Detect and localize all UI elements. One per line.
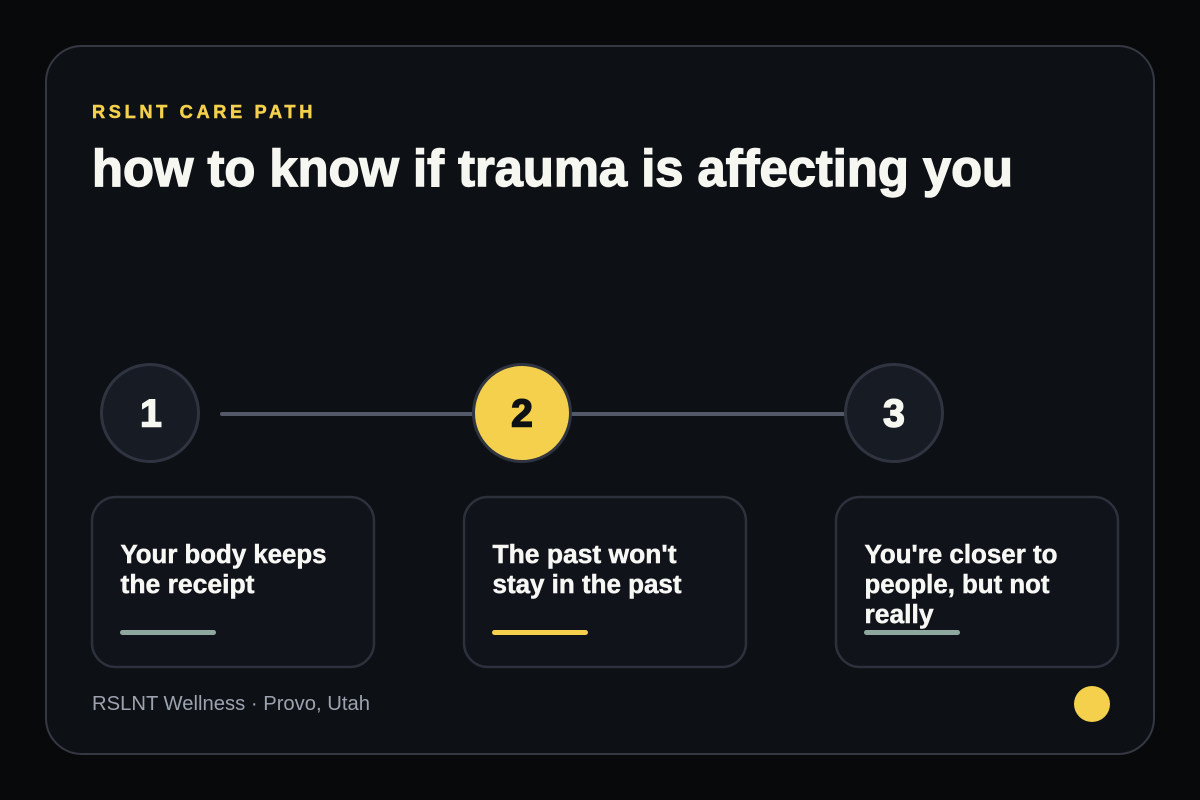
step 2 card: stay in the past xyxy=(492,571,682,599)
step 2 card: The past won't xyxy=(492,541,677,569)
step 3 card xyxy=(836,497,1118,667)
footer dot xyxy=(1074,686,1110,722)
step 3 card: people, but not xyxy=(864,571,1050,599)
step 1 card xyxy=(92,497,374,667)
connector: step 2 to step 3 xyxy=(570,412,846,416)
eyebrow: RSLNT CARE PATH xyxy=(92,102,316,122)
footer credit: RSLNT Wellness · Provo, Utah xyxy=(92,693,370,715)
step 2 marker: 2 xyxy=(511,392,533,436)
connector: step 1 to step 2 xyxy=(220,412,474,416)
step 3 marker: 3 xyxy=(883,392,905,436)
step 1 marker xyxy=(102,364,198,462)
step 1 card: Your body keeps xyxy=(120,541,326,569)
step 2 card xyxy=(464,497,746,667)
step 3 marker xyxy=(846,364,942,462)
step 3 card: really xyxy=(864,601,934,629)
step 1 card: the receipt xyxy=(120,571,255,599)
step 1 marker: 1 xyxy=(140,392,162,436)
title: how to know if trauma is affecting you xyxy=(92,140,1013,198)
step 3 card: You're closer to xyxy=(864,541,1058,569)
step 2 marker xyxy=(474,364,570,462)
